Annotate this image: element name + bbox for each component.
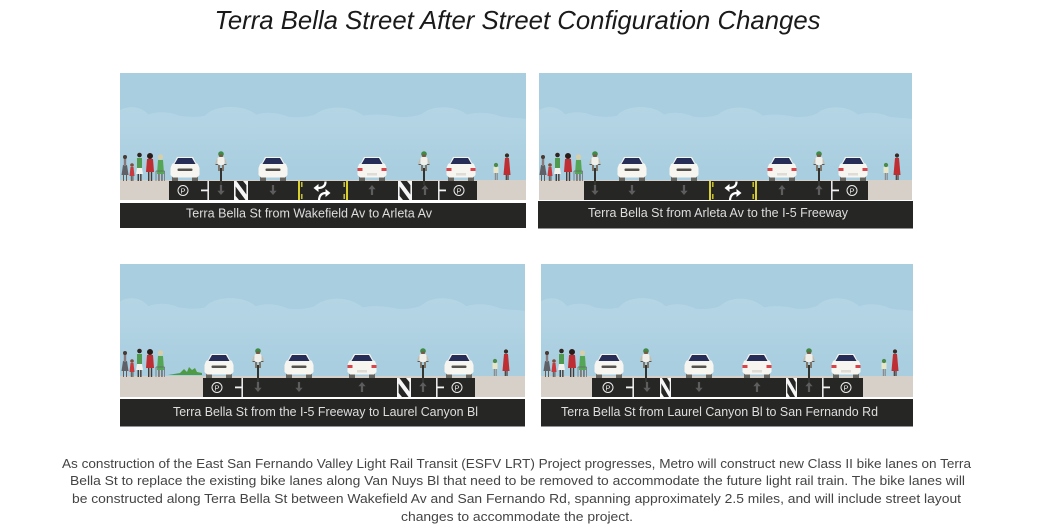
bike lane arrow [217,185,225,195]
parking symbol: P [456,186,462,195]
description text [62,457,971,524]
buffer hatch [397,378,411,397]
car [444,354,474,378]
sky [541,264,913,378]
cyclist [418,151,430,185]
lane arrow [695,382,703,392]
car [670,157,698,181]
parking symbol: P [454,383,460,392]
pedestrians right [492,349,510,376]
lane tick [436,378,444,397]
cyclist [418,348,428,382]
roadway [203,378,475,397]
buffer hatch [234,181,248,200]
description text: As construction of the East San Fernando Valley Light Rail Transit (ESFV LRT) Project progresses, Metro will construct new Class II bike lanes on Terra [62,457,971,471]
yellow line [298,181,302,200]
clouds [120,107,526,181]
cyclist [590,151,600,185]
yellow line [709,181,713,200]
lane arrow [680,185,688,195]
car [618,157,646,181]
car [838,157,868,181]
car [446,157,476,181]
yellow line [753,181,757,200]
pedestrians left [122,349,164,377]
parking symbol [454,186,464,196]
clouds [541,298,913,378]
lane arrow [628,185,636,195]
yellow line [344,181,348,200]
pedestrians right [882,349,898,376]
parking symbol: P [214,383,220,392]
lane arrow [295,382,303,392]
pedestrians left [544,349,586,377]
bush [168,367,202,375]
lane arrow [815,185,823,195]
cyclist [216,151,226,185]
buffer hatch [398,181,412,200]
lane tick [235,378,243,397]
sky [120,73,526,181]
car [170,157,200,181]
car [204,354,234,378]
description text: changes to accommodate the project. [401,510,633,524]
turn arrows [314,182,330,201]
sidewalk [539,180,912,200]
lane arrow [778,185,786,195]
pedestrians right [884,153,900,180]
lane arrow [591,185,599,195]
lane arrow [368,185,376,195]
parking symbol [452,382,462,392]
pedestrians left [122,153,164,181]
lane arrow [753,382,761,392]
lane tick [201,181,209,200]
sky [539,73,912,181]
panel: Arleta Av to the I-5 Freeway [538,73,913,228]
sidewalk [120,376,525,397]
label band [538,201,913,228]
label: Terra Bella St from Wakefield Av to Arleta Av [186,206,433,220]
car [684,354,714,378]
pedestrians right [494,153,510,180]
lane arrow [269,185,277,195]
roadway [169,181,477,201]
title: Terra Bella Street After Street Configuration Changes [214,5,820,35]
lane tick [822,378,830,397]
lane arrow [358,382,366,392]
cyclist [814,151,824,185]
sky [120,264,525,378]
car [358,157,386,181]
buffer hatch [786,378,797,397]
clouds [120,298,525,378]
parking symbol: P [180,186,186,195]
panel: I-5 Freeway to Laurel Canyon Bl [120,264,525,426]
description text: Bella St to replace the existing bike lanes along Van Nuys Bl that need to be removed to accommodate the future light rail train. The bike lanes will [70,474,965,488]
bike lane arrow [805,382,813,392]
lane tick [626,378,634,397]
car [284,354,314,378]
label: Terra Bella St from Arleta Av to the I-5 Freeway [588,206,849,220]
sidewalk [541,376,913,397]
panel: Wakefield Av to Arleta Av [120,73,526,228]
parking symbol [212,382,222,392]
car [348,354,376,378]
car [258,157,288,181]
parking symbol: P [849,186,855,195]
lane arrow [254,382,262,392]
turn arrows [724,182,742,201]
car [594,354,624,378]
lane tick [438,181,446,200]
parking symbol [847,186,857,196]
bike lane arrow [643,382,651,392]
buffer hatch [660,378,671,397]
parking symbol [603,382,613,392]
roadway [584,181,868,201]
label band [120,399,525,426]
bike lane arrow [419,382,427,392]
sidewalk [120,180,526,200]
cyclist [252,348,264,382]
bike lane arrow [421,185,429,195]
parking symbol [178,186,188,196]
lane tick [831,181,839,200]
car [832,354,860,378]
car [768,157,796,181]
cyclist [804,348,814,382]
car [742,354,772,378]
pedestrians left [540,153,582,181]
parking symbol: P [605,383,611,392]
label: Terra Bella St from Laurel Canyon Bl to San Fernando Rd [561,405,878,419]
cyclist [640,348,652,382]
parking symbol [841,382,851,392]
clouds [539,107,912,181]
label band [120,203,526,228]
label band [541,399,913,426]
parking symbol: P [843,383,849,392]
label: Terra Bella St from the I-5 Freeway to Laurel Canyon Bl [173,405,478,419]
roadway [592,378,863,397]
panel: Laurel Canyon Bl to San Fernando Rd [541,264,913,426]
description text: be constructed along Terra Bella St between Wakefield Av and San Fernando Rd, spanning approximately 2.5 miles, and will include street layout [72,492,962,506]
